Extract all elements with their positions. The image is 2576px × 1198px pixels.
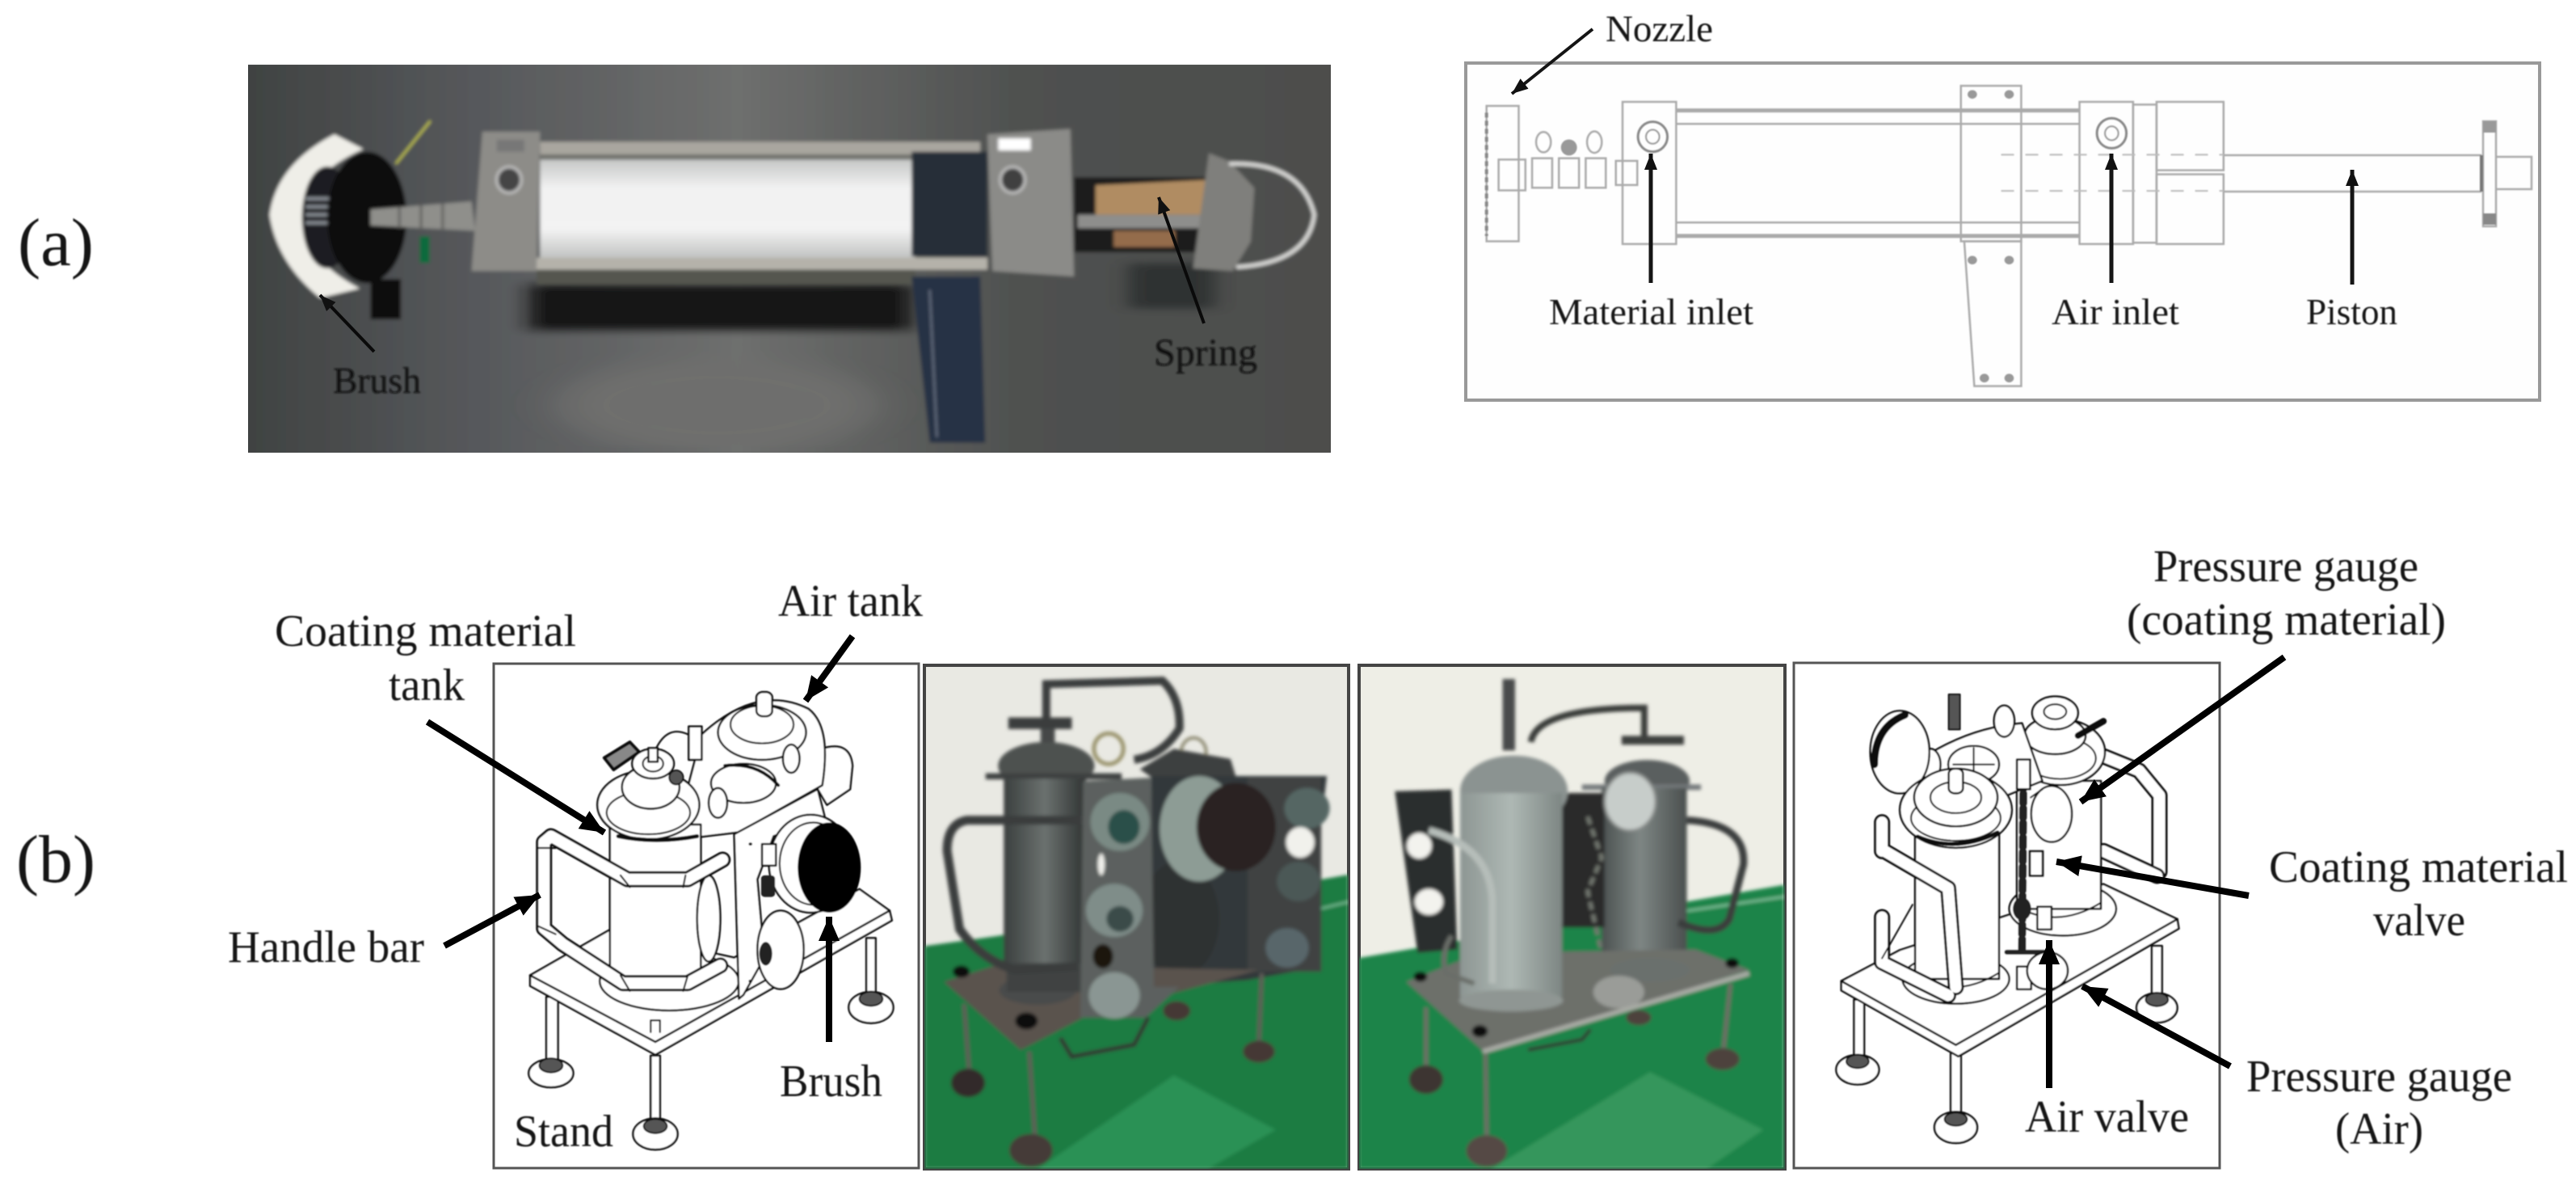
panel: spray gun schematic [1466,8,2540,400]
schematic frame [1466,63,2540,400]
arrow: brush [826,917,832,1042]
arrow: air valve [2046,940,2052,1088]
panel: spray gun photograph [241,62,1345,456]
arrow: spring [1159,197,1204,323]
text: Air tank: Air tank [778,576,923,626]
text: Pressure gauge (Air) [2246,1052,2512,1154]
isometric line drawing, gauge side [1836,694,2178,1143]
arrow: air tank [806,636,852,701]
frame [1794,663,2220,1168]
frame [494,664,919,1168]
text: Material inlet: Material inlet [1549,291,1753,332]
text: Spring: Spring [1154,331,1257,374]
text: Air valve: Air valve [2025,1092,2189,1142]
text: Nozzle: Nozzle [1606,8,1713,50]
arrow: coating material tank [427,722,604,833]
photo of spray gun [241,62,1345,456]
text: Piston: Piston [2306,291,2397,332]
text: Air inlet: Air inlet [2052,291,2179,332]
text: Stand: Stand [514,1107,613,1157]
label: (a): (a) [18,205,94,281]
text: Handle bar: Handle bar [228,922,424,972]
arrow: pressure gauge coating material [2081,657,2284,802]
arrow: pressure gauge air [2082,986,2230,1066]
frame [924,665,1349,1169]
text: Coating material tank: Coating material [275,606,576,656]
text: Pressure gauge (Air): (Air) [2335,1104,2423,1154]
arrow: coating material valve [2056,862,2249,896]
text: Brush: Brush [333,360,421,401]
text: Pressure gauge (coating material) [2127,542,2446,645]
panel: gauge side line drawing [1794,542,2568,1168]
text: Pressure gauge (coating material): Pressure gauge [2153,542,2418,592]
arrow: brush [320,295,374,352]
arrow: material inlet [1648,154,1653,283]
isometric line drawing, brush side [528,692,894,1149]
text: Coating material valve: Coating material [2269,842,2568,892]
text: Coating material tank [275,606,576,711]
text: Coating material valve [2269,842,2568,946]
text: Pressure gauge (coating material): (coating material) [2127,595,2446,645]
schematic drawing [1487,86,2532,386]
panel: photograph of device, gauge side [1358,665,1785,1169]
text: Pressure gauge (Air): Pressure gauge [2246,1052,2512,1102]
text: Brush: Brush [780,1057,882,1107]
frame [1359,665,1785,1169]
label: (b): (b) [16,822,95,897]
arrow: piston [2350,170,2355,285]
arrow: handle bar [444,895,540,946]
panel: photograph of device, brush side [924,665,1349,1169]
panel: brush side line drawing [228,576,923,1168]
photo content [1358,679,1784,1169]
photo content [924,681,1349,1169]
text: Coating material valve: valve [2373,896,2465,946]
text: Coating material tank: tank [389,660,465,711]
arrow: nozzle [1512,29,1593,94]
arrow: air inlet [2109,154,2114,283]
